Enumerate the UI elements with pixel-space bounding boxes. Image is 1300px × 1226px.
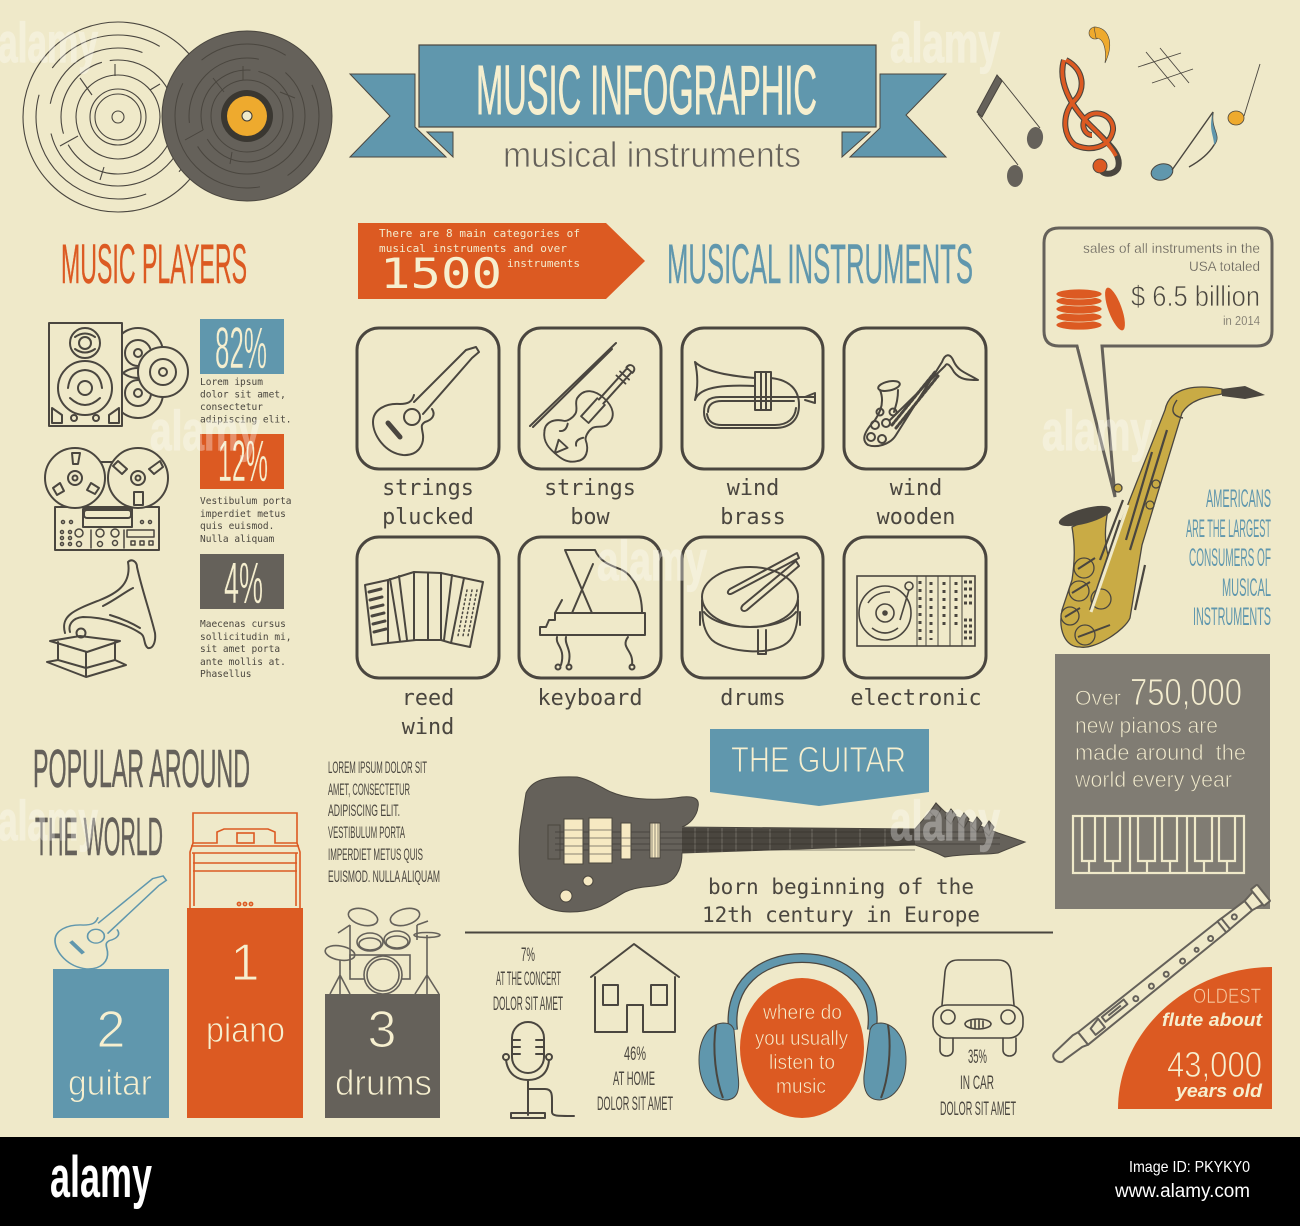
text: where do you usually listen to music: where do (762, 1001, 842, 1024)
speech bubble: sales: sales of all instruments in the (1083, 240, 1260, 256)
icon: headphones with question (699, 958, 906, 1118)
panel: electronic: electronic (850, 686, 982, 711)
stat: 82%: adipiscing elit. (200, 414, 292, 426)
stat: at home: 46% (624, 1044, 646, 1065)
footer band: Image ID: PKYKY0 (1129, 1159, 1250, 1176)
text block: lorem: EUISMOD. NULLA ALIQUAM (328, 867, 440, 886)
panel: pianos: world every year (1074, 767, 1232, 792)
stat: 4%: Maecenas cursus (200, 619, 286, 630)
text block: lorem: VESTIBULUM PORTA (328, 823, 405, 842)
text: AT THE CONCERT (496, 969, 561, 990)
icon: upright piano outline (190, 813, 300, 908)
icon: violin and bow (530, 343, 651, 470)
stat: at the concert: 7% (521, 945, 535, 966)
panel: wind wooden (844, 328, 986, 530)
panel: pianos: new pianos are (1075, 713, 1218, 738)
icon: guitar outline (55, 876, 166, 969)
text: where do you usually listen to music: music (776, 1075, 826, 1098)
podium: drums (324, 905, 440, 1118)
speech bubble: sales: USA totaled (1189, 258, 1260, 274)
watermarks: alamy (890, 789, 1000, 852)
icon: grand piano (540, 550, 645, 670)
stat: 12%: Nulla aliquam (200, 534, 275, 545)
text block: americans (1186, 485, 1271, 631)
icon: trumpet (695, 362, 815, 428)
text: DOLOR SIT AMET (597, 1094, 673, 1115)
stat: 12% (200, 429, 292, 545)
podium: piano (187, 813, 303, 1118)
heading: popular around the world (33, 739, 250, 867)
panel: oldest flute: 43,000 (1167, 1044, 1262, 1085)
stat: in car: 35% (968, 1047, 987, 1068)
stat: 12%: Vestibulum porta (200, 496, 292, 507)
stat: 4%: 4% (224, 551, 263, 616)
icon: car (933, 960, 1023, 1056)
text: DOLOR SIT AMET (940, 1099, 1016, 1120)
icon: saxophone (864, 355, 978, 446)
icon: drum kit (324, 905, 440, 994)
text block: lorem: AMET, CONSECTETUR (328, 780, 410, 799)
panel: strings plucked: plucked (382, 505, 474, 530)
panel: electronic (844, 537, 986, 711)
icon: reel to reel tape deck (45, 448, 168, 550)
callout: 1500 instruments (358, 223, 645, 299)
watermarks (0, 11, 1152, 852)
icon: house (591, 944, 679, 1032)
watermarks: alamy (0, 11, 98, 74)
callout: 1500 instruments: 1500 (380, 249, 502, 298)
text block: guitar origin: born beginning of the (708, 875, 974, 899)
text: where do you usually listen to music (755, 1001, 849, 1098)
stat: 82%: consectetur (200, 402, 263, 413)
panel: wind wooden: wind (890, 476, 942, 501)
panel: drums (682, 537, 823, 711)
watermarks: alamy (890, 11, 1000, 74)
panel: oldest flute: OLDEST (1193, 985, 1261, 1008)
footer band (0, 1137, 1300, 1226)
panel: drums: drums (720, 686, 786, 711)
stat: 82%: Lorem ipsum (200, 377, 263, 388)
panel: reed wind: reed (402, 686, 454, 711)
banner: the guitar: THE GUITAR (731, 739, 906, 780)
icon: acoustic guitar (373, 347, 479, 455)
speech bubble: sales: in 2014 (1223, 313, 1260, 328)
panel: reed wind (357, 537, 499, 740)
panel: reed wind: wind (402, 715, 454, 740)
stat: at home: AT HOME (613, 1069, 655, 1090)
icon: turntable and mixer (857, 576, 975, 646)
panel: strings plucked (357, 328, 499, 530)
watermarks: alamy (1042, 399, 1152, 462)
text: where do you usually listen to music: listen to (769, 1051, 835, 1074)
icon: electric guitar (519, 777, 1025, 912)
panel: keyboard (519, 537, 661, 711)
panel: strings plucked: strings (382, 476, 474, 501)
panel: strings bow (519, 328, 661, 530)
vinyl record outline (23, 22, 213, 212)
text block: lorem: ADIPISCING ELIT. (328, 801, 400, 820)
stat: at home (597, 1044, 673, 1115)
icon: recorder flute (1049, 885, 1270, 1068)
stat: 12%: imperdiet metus (200, 509, 286, 520)
text: where do you usually listen to music: you usually (755, 1027, 849, 1050)
stat: at the concert (493, 945, 563, 1015)
speech bubble: sales: $ 6.5 billion (1131, 281, 1260, 313)
stat: in car: IN CAR (960, 1073, 994, 1094)
stat: 82% (200, 316, 292, 426)
watermarks: alamy (0, 789, 98, 852)
subtitle: musical instruments (503, 134, 801, 175)
footer band: www.alamy.com (1114, 1181, 1250, 1202)
panel: strings bow: strings (544, 476, 636, 501)
podium: piano: piano (206, 1009, 285, 1050)
title banner (350, 45, 946, 157)
stat: 4%: ante mollis at. (200, 657, 286, 668)
text block: lorem: IMPERDIET METUS QUIS (328, 845, 423, 864)
text block: guitar origin: 12th century in Europe (702, 903, 980, 927)
panel: pianos: 750,000 (1130, 672, 1242, 714)
icon: accordion (365, 572, 483, 647)
callout: 1500 instruments: musical instruments and over (379, 242, 567, 255)
callout: 1500 instruments: There are 8 main categories of (379, 227, 580, 240)
icon: golden saxophone (1057, 386, 1265, 647)
stat: 82%: dolor sit amet, (200, 390, 286, 400)
stat: 4% (200, 551, 292, 680)
podium: drums: drums (335, 1062, 432, 1103)
title banner: MUSIC INFOGRAPHIC (476, 51, 817, 129)
icon: coins (1056, 285, 1129, 333)
heading: popular around the world: THE WORLD (35, 807, 163, 867)
panel: oldest flute: years old (1175, 1081, 1263, 1101)
panel: wind brass (682, 328, 823, 530)
stat: 4%: sit amet porta (200, 644, 280, 655)
stat: 12%: quis euismod. (200, 521, 274, 532)
text: MUSIC PLAYERS (61, 232, 247, 295)
panel: pianos (1055, 654, 1270, 909)
podium: guitar: 2 (97, 1001, 125, 1059)
text: POPULAR AROUND (33, 739, 250, 799)
stat: 4%: sollicitudin mi, (200, 632, 292, 643)
panel: oldest flute: flute about (1162, 1010, 1263, 1030)
icon: piano keys (1073, 816, 1244, 873)
text block: lorem: LOREM IPSUM DOLOR SIT (328, 758, 427, 777)
podium: guitar (53, 876, 169, 1118)
watermarks: alamy (150, 399, 260, 462)
panel: wind brass: brass (720, 505, 786, 530)
stat: 4%: Phasellus (200, 669, 251, 680)
vinyl record filled (162, 31, 332, 201)
icon: snare drum (700, 553, 800, 654)
stat: 82%: 82% (215, 316, 267, 381)
podium: piano: 1 (231, 934, 259, 992)
watermarks: alamy (597, 529, 707, 592)
footer band: alamy (50, 1145, 152, 1210)
podium: guitar: guitar (68, 1062, 152, 1103)
text: DOLOR SIT AMET (493, 994, 563, 1015)
text block: lorem (328, 758, 440, 886)
stat: 12%: 12% (218, 429, 268, 494)
panel: wind wooden: wooden (877, 505, 955, 530)
panel: pianos: Over (1075, 687, 1121, 710)
icon: speaker and discs (49, 323, 188, 426)
speech bubble: sales (1044, 228, 1272, 497)
panel: wind brass: wind (727, 476, 779, 501)
panel: strings bow: bow (570, 505, 611, 530)
panel: oldest flute (1118, 967, 1272, 1109)
icon: gramophone (47, 560, 155, 677)
panel: keyboard: keyboard (538, 686, 642, 711)
stat: in car (940, 1047, 1016, 1120)
banner: the guitar (710, 729, 929, 806)
panel: pianos: made around the (1075, 740, 1246, 765)
callout: 1500 instruments: instruments (507, 257, 580, 270)
music notes (977, 27, 1260, 187)
podium: drums: 3 (368, 1001, 396, 1059)
text block: guitar origin (702, 875, 980, 927)
icon: microphone (503, 1022, 574, 1118)
